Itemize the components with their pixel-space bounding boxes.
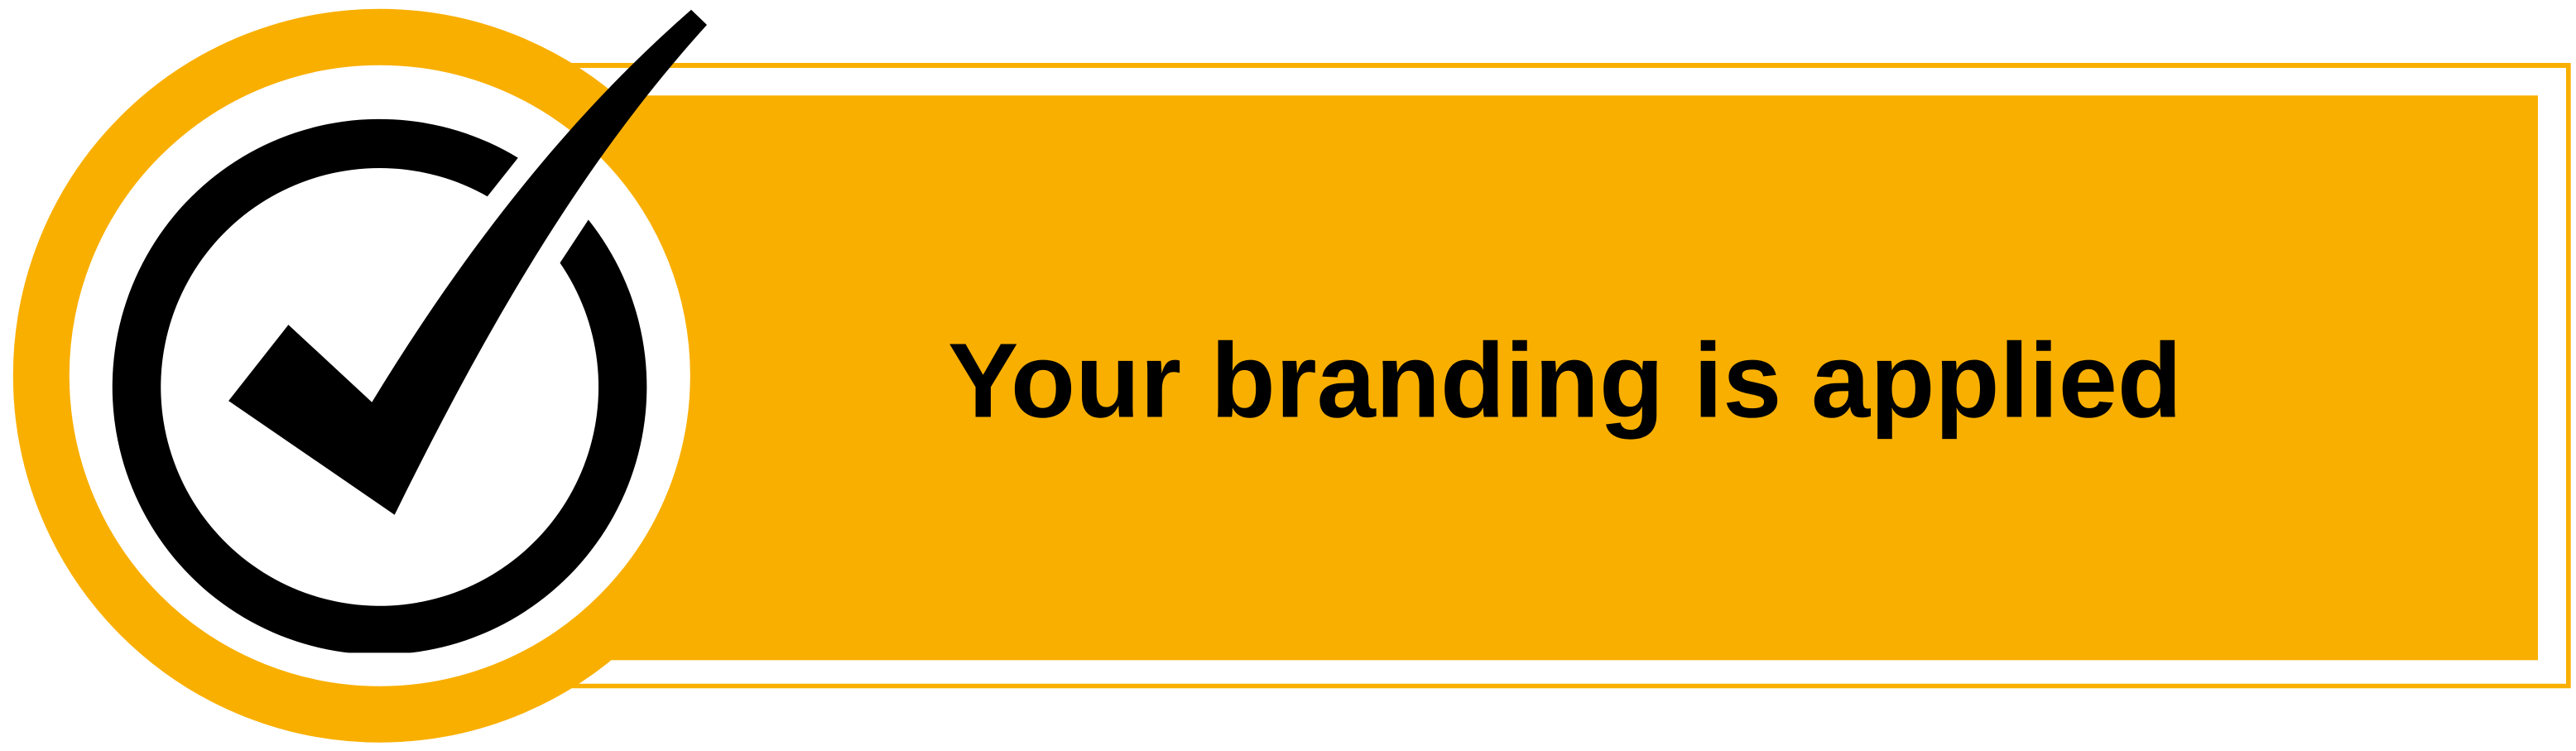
icon: badge circle [41, 10, 718, 715]
icon: check mark [228, 10, 707, 515]
banner text: Your branding is applied [948, 321, 2182, 440]
outline frame [530, 63, 2571, 688]
orange outer ring [41, 37, 718, 715]
black broken ring [113, 119, 646, 655]
filled banner panel [530, 95, 2538, 660]
